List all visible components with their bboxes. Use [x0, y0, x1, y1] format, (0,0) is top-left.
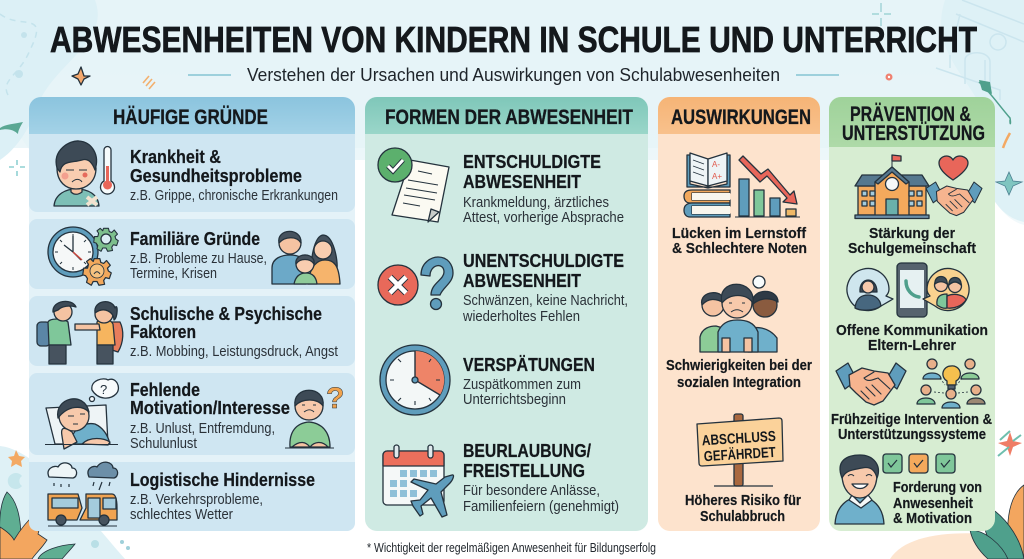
- text: Logistische Hindernisse: Logistische Hindernisse: [130, 469, 315, 490]
- icon: unmotivated child with question mark: ?: [326, 382, 344, 415]
- icon: warning sign: GEFÄHRDET: [703, 444, 776, 465]
- text: Lücken im Lernstoff: Lücken im Lernstoff: [672, 225, 807, 242]
- header: Formen der Abwesenheit: [365, 97, 648, 134]
- text: Fehlende Motivation: Motivation/Interesse: [130, 397, 290, 418]
- icon: warning sign: ABSCHLUSS: [701, 429, 777, 449]
- text: Krankheit: [130, 146, 338, 204]
- panel: Auswirkungen: [658, 97, 820, 531]
- footnote: * Wichtigkeit der regelmäßigen Anwesenheit für Bildungserfolg: [367, 541, 656, 555]
- text: Schulische Faktoren: Faktoren: [130, 321, 196, 342]
- text: Familiäre Gründe: z.B. Probleme zu Hause,: [130, 251, 267, 267]
- icon: teacher bubble, phone and parents bubble: [847, 263, 969, 317]
- text: Unentschuldigte Abwesenheit: wiederholtes Fehlen: [462, 309, 580, 325]
- text: Unentschuldigte Abwesenheit: Schwänzen, keine Nachricht,: [463, 293, 628, 309]
- icon: calendar with plane: [383, 445, 453, 517]
- text: Forderung von Anwesenheit: & Motivation: [893, 510, 972, 527]
- icon: late clock: [380, 345, 450, 415]
- text: Offene Kommunikation: Offene Kommunikation: [836, 322, 988, 339]
- icon: school building: [855, 155, 929, 218]
- text: Frühzeitige Intervention: Unterstützungssysteme: [838, 426, 986, 443]
- text: Krankheit: Krankheit &: [130, 146, 221, 167]
- row: Krankheit: [29, 134, 355, 212]
- text: Unentschuldigte Abwesenheit: UNENTSCHULDIGTE: [463, 250, 624, 271]
- icon: isolated children group: [700, 276, 778, 352]
- text: Offene Kommunikation: [836, 322, 988, 354]
- text: Verspätungen: VERSPÄTUNGEN: [463, 354, 595, 375]
- icon: heart: [939, 156, 968, 180]
- row: Familiäre Gründe: [29, 219, 355, 289]
- text: Frühzeitige Intervention: [831, 411, 992, 443]
- icon: sick child with thermometer: [54, 141, 114, 206]
- text: Höheres Risiko: Höheres Risiko für: [685, 492, 801, 509]
- text: Verspätungen: Unterrichtsbeginn: [463, 392, 566, 408]
- header: Häufige Gründe: HÄUFIGE GRÜNDE: [113, 106, 268, 129]
- text: Frühzeitige Intervention: Frühzeitige Intervention &: [831, 411, 992, 428]
- text: Verspätungen: [463, 354, 595, 408]
- text: Lücken im Lernstoff: [672, 225, 807, 257]
- icon: handshake: [926, 182, 982, 216]
- text: Entschuldigte Abwesenheit: Krankmeldung, ärztliches: [463, 195, 609, 211]
- text: Verspätungen: Zuspätkommen zum: [463, 377, 581, 393]
- text: Beurlaubung: FREISTELLUNG: [463, 460, 585, 481]
- text: Familiäre Gründe: [130, 228, 267, 282]
- text: Krankheit: z.B. Grippe, chronische Erkrankungen: [130, 188, 338, 204]
- icon: excused document: [378, 148, 449, 222]
- text: Beurlaubung: BEURLAUBUNG/: [463, 440, 591, 461]
- text: Entschuldigte Abwesenheit: Attest, vorherige Absprache: [463, 210, 624, 226]
- panel: Formen der Abwesenheit: [365, 97, 648, 531]
- row: Schulische Faktoren: [29, 296, 355, 366]
- icon: thought bubble: ?: [100, 382, 107, 397]
- text: Fehlende Motivation: Schulunlust: [130, 436, 197, 452]
- text: Offene Kommunikation: Eltern-Lehrer: [868, 337, 956, 354]
- text: Entschuldigte Abwesenheit: ENTSCHULDIGTE: [463, 151, 601, 172]
- text: Schulische Faktoren: z.B. Mobbing, Leistungsdruck, Angst: [130, 344, 338, 360]
- icon: checklist boxes: [883, 454, 955, 473]
- plant bottom right: [970, 485, 1024, 559]
- header: Auswirkungen: [658, 97, 820, 134]
- icon: large handshake: [836, 363, 906, 405]
- text: Logistische Hindernisse: schlechtes Wetter: [130, 507, 233, 523]
- text: Schwierigkeiten: [666, 357, 812, 391]
- text: Stärkung: [848, 225, 976, 257]
- text: Fehlende Motivation: Fehlende: [130, 379, 200, 400]
- text: Stärkung: Schulgemeinschaft: [848, 240, 976, 257]
- icon: warning sign: [697, 414, 783, 486]
- text: Forderung von Anwesenheit: Anwesenheit: [893, 495, 973, 512]
- text: Forderung von Anwesenheit: [893, 479, 982, 527]
- icon: family: [272, 231, 340, 284]
- header: Formen der Abwesenheit: FORMEN DER ABWESENHEIT: [385, 106, 633, 129]
- text: Schwierigkeiten: sozialen Integration: [677, 374, 801, 391]
- row: Logistische Hindernisse: [29, 462, 355, 531]
- decorative school outline top right: [936, 0, 1024, 100]
- text: Lücken im Lernstoff: & Schlechtere Noten: [672, 240, 807, 257]
- icon: unmotivated child with question mark: [285, 382, 344, 448]
- header: Häufige Gründe: [29, 97, 355, 134]
- text: Familiäre Gründe: Termine, Krisen: [130, 266, 217, 282]
- text: Unentschuldigte Abwesenheit: ABWESENHEIT: [463, 270, 582, 291]
- header: Prävention und Unterstützung: [829, 97, 995, 147]
- header: Auswirkungen: AUSWIRKUNGEN: [671, 106, 811, 129]
- text: Schulische Faktoren: Schulische & Psychische: [130, 303, 322, 324]
- subtitle: Verstehen der Ursachen und Auswirkungen von Schulabwesenheiten: [247, 64, 780, 85]
- icon: smiling boy: [835, 455, 884, 524]
- text: Logistische Hindernisse: z.B. Verkehrsprobleme,: [130, 492, 263, 508]
- text: Beurlaubung: Für besondere Anlässe,: [463, 483, 600, 499]
- icon: team with light bulb: [917, 359, 985, 408]
- icon: sleepy child on pillow: [45, 379, 118, 449]
- icon: weather clouds and broken bus: [48, 462, 118, 526]
- icon: thermometer: [100, 146, 114, 194]
- icon: bullying children: [37, 301, 123, 364]
- plant bottom left: [0, 492, 75, 559]
- icon: books and falling chart: A-: [712, 160, 720, 169]
- icon: books and falling chart: A+: [712, 172, 722, 181]
- text: Beurlaubung: [463, 440, 619, 515]
- icon: books and falling chart: [684, 153, 800, 217]
- icon: unexcused cross and question mark: [378, 257, 453, 310]
- panel: Prävention und Unterstützung: [829, 97, 995, 531]
- text: Entschuldigte Abwesenheit: ABWESENHEIT: [463, 171, 582, 192]
- text: Fehlende Motivation: [130, 379, 290, 452]
- text: Unentschuldigte Abwesenheit: [462, 250, 628, 325]
- header: Prävention und Unterstützung: UNTERSTÜTZUNG: [842, 122, 985, 145]
- text: Höheres Risiko: Schulabbruch: [700, 508, 785, 525]
- header: Prävention und Unterstützung: PRÄVENTION &: [850, 103, 971, 126]
- icon: clock with gears: [48, 227, 118, 285]
- text: Schulische Faktoren: [130, 303, 338, 360]
- text: Beurlaubung: Familienfeiern (genehmigt): [463, 499, 619, 515]
- text: Höheres Risiko: [685, 492, 801, 525]
- text: Logistische Hindernisse: [130, 469, 315, 523]
- panel: Häufige Gründe: [29, 97, 355, 531]
- text: Krankheit: Gesundheitsprobleme: [130, 165, 302, 186]
- text: Fehlende Motivation: z.B. Unlust, Entfremdung,: [130, 421, 275, 437]
- text: Forderung von Anwesenheit: Forderung von: [893, 479, 982, 496]
- text: Schwierigkeiten: Schwierigkeiten bei der: [666, 357, 812, 374]
- text: Familiäre Gründe: Familiäre Gründe: [130, 228, 260, 249]
- row: Fehlende Motivation: [29, 373, 355, 455]
- text: Entschuldigte Abwesenheit: [463, 151, 624, 226]
- text: Stärkung: Stärkung der: [869, 225, 955, 242]
